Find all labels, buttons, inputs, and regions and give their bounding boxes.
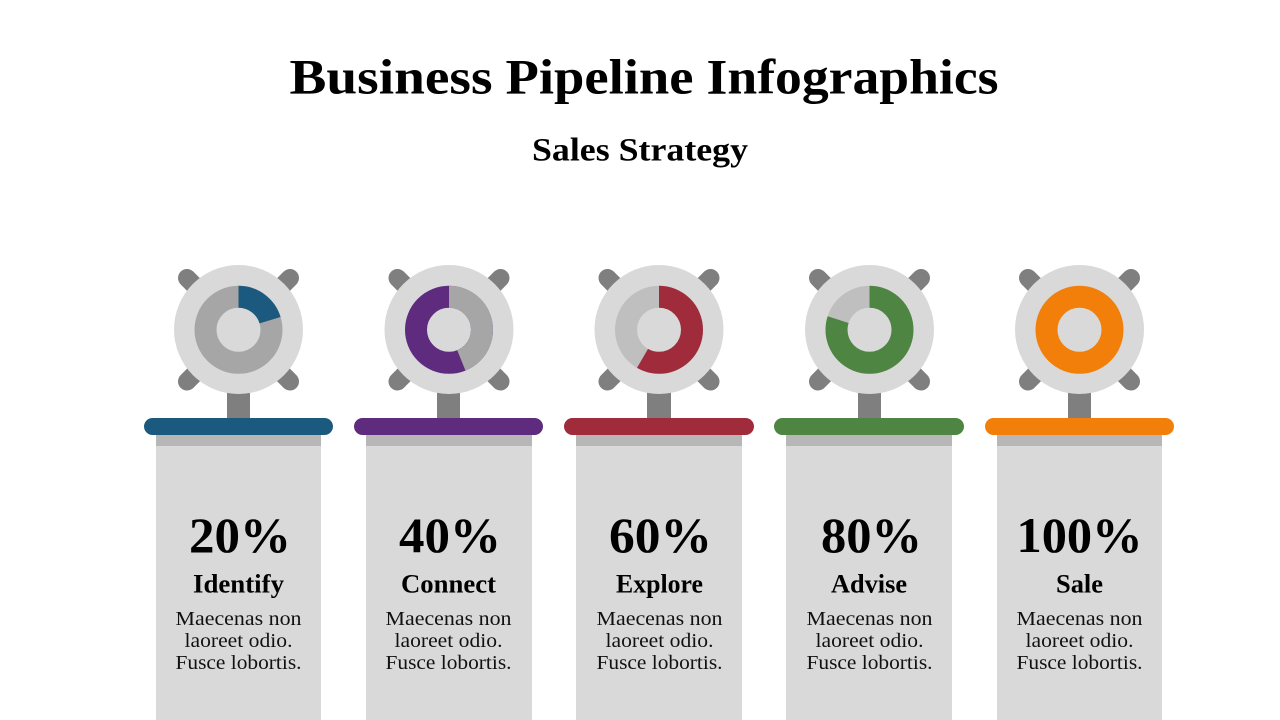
card shadow band: connect <box>366 435 532 446</box>
description: identify: Fusce lobortis. <box>176 652 302 674</box>
subtitle: Sales Strategy <box>532 132 749 168</box>
donut chart: 20 percent <box>206 297 272 363</box>
description: advise: laoreet odio. <box>816 630 924 652</box>
description: advise <box>806 608 932 674</box>
title: Infographics <box>706 48 998 104</box>
cap bar: advise <box>774 418 964 435</box>
heading: identify: Identify <box>193 570 284 598</box>
stem: sale <box>1068 385 1091 420</box>
stem: explore <box>647 385 671 420</box>
description: advise: Maecenas non <box>806 608 932 630</box>
panel: explore 60% <box>564 265 754 720</box>
description: identify <box>176 608 302 674</box>
valve disc: identify <box>174 265 303 394</box>
icon: valve handles explore <box>608 278 710 382</box>
cap bar: sale <box>985 418 1174 435</box>
description: sale: Fusce lobortis. <box>1016 652 1142 674</box>
description: connect <box>386 608 512 674</box>
icon: valve handles advise <box>818 278 921 382</box>
title: Business <box>290 48 492 104</box>
percentage: 20%: 20% <box>189 507 291 563</box>
heading: sale: Sale <box>1056 570 1103 598</box>
percentage: 60%: 60% <box>609 507 712 563</box>
stem: identify <box>227 385 250 420</box>
description: explore: Fusce lobortis. <box>596 652 722 674</box>
percentage: 40%: 40% <box>399 507 501 563</box>
stem: connect <box>437 385 460 420</box>
cap bar: explore <box>564 418 754 435</box>
description: sale: Maecenas non <box>1016 608 1142 630</box>
icon: valve handles connect <box>398 278 500 382</box>
valve disc: sale <box>1015 265 1144 394</box>
description: identify: laoreet odio. <box>184 630 292 652</box>
valve disc: connect <box>384 265 514 394</box>
stem: advise <box>858 385 881 420</box>
icon: valve handles sale <box>1028 278 1131 382</box>
card shadow band: identify <box>156 435 321 446</box>
text card: sale <box>997 435 1162 720</box>
heading: advise: Advise <box>831 570 907 598</box>
title: Pipeline <box>506 48 694 104</box>
description: connect: Fusce lobortis. <box>386 652 512 674</box>
cap bar: identify <box>144 418 333 435</box>
percentage: 80%: 80% <box>821 507 922 563</box>
valve disc: advise <box>805 265 934 394</box>
description: sale: laoreet odio. <box>1026 630 1134 652</box>
card shadow band: sale <box>997 435 1162 446</box>
description: connect: Maecenas non <box>386 608 512 630</box>
cap bar: connect <box>354 418 543 435</box>
description: explore: Maecenas non <box>596 608 722 630</box>
description: explore <box>596 608 722 674</box>
card shadow band: advise <box>786 435 952 446</box>
text card: advise <box>786 435 952 720</box>
donut chart: 80 percent <box>836 297 902 363</box>
text card: connect <box>366 435 532 720</box>
valve disc: explore <box>594 265 724 394</box>
panel: connect 40% <box>354 265 543 720</box>
panel: sale 100% <box>985 265 1174 720</box>
description: explore: laoreet odio. <box>606 630 714 652</box>
text card: identify <box>156 435 321 720</box>
heading: connect: Connect <box>401 570 496 598</box>
panel: identify 20% <box>144 265 333 720</box>
title <box>290 48 998 104</box>
card shadow band: explore <box>576 435 742 446</box>
percentage: 100%: 100% <box>1016 507 1142 563</box>
donut chart: 100 percent <box>1046 297 1112 363</box>
icon: valve handles identify <box>187 278 290 382</box>
description: identify: Maecenas non <box>176 608 302 630</box>
donut chart: 60 percent <box>626 297 692 363</box>
panel: advise 80% <box>774 265 964 720</box>
description: sale <box>1016 608 1142 674</box>
description: connect: laoreet odio. <box>394 630 502 652</box>
text card: explore <box>576 435 742 720</box>
heading: explore: Explore <box>616 570 703 598</box>
description: advise: Fusce lobortis. <box>806 652 932 674</box>
donut chart: 40 percent <box>416 297 482 363</box>
